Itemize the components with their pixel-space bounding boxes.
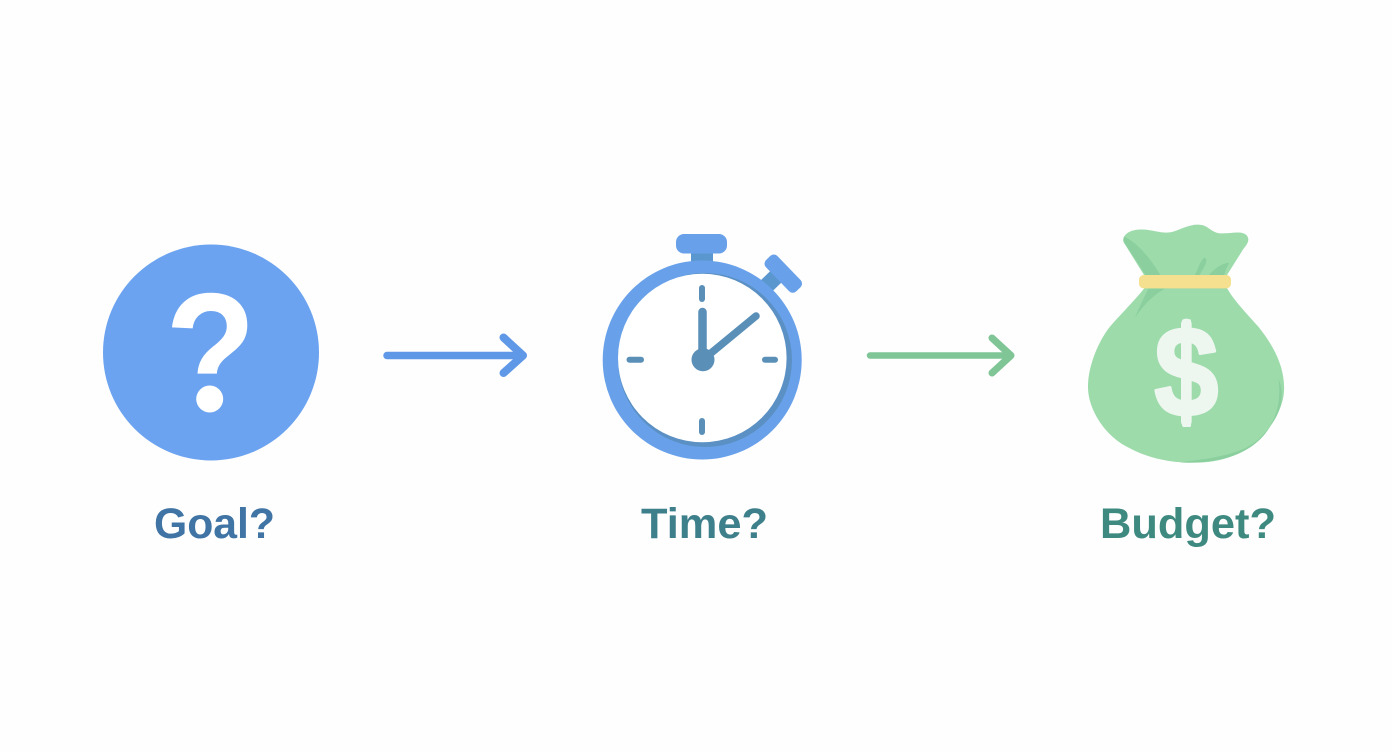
stopwatch side stem — [760, 271, 782, 292]
icon: blue circle with question mark: ? — [165, 260, 256, 444]
stopwatch ring — [603, 260, 802, 460]
infographic: goal, time, budget flow — [103, 224, 1284, 547]
label: Time?: Time? — [641, 500, 768, 548]
stopwatch side button — [762, 252, 804, 295]
icon: money bag — [1088, 225, 1284, 463]
bag neck — [1123, 225, 1248, 277]
stopwatch hands — [702, 312, 756, 360]
dollar sign: $ — [1154, 299, 1218, 443]
stopwatch centre pin — [692, 348, 714, 371]
arrow: blue, goal to time — [387, 338, 523, 373]
stopwatch hour ticks — [630, 288, 775, 432]
stopwatch face — [618, 274, 787, 442]
stopwatch inner shadow — [618, 273, 792, 447]
arrow: green, time to budget — [870, 338, 1011, 373]
bag body shading — [1135, 289, 1282, 463]
bag neck folds — [1124, 237, 1229, 276]
label: Goal?: Goal? — [154, 500, 275, 548]
label: Budget?: Budget? — [1100, 500, 1276, 548]
bag body — [1088, 287, 1284, 463]
icon: stopwatch — [603, 234, 804, 460]
stopwatch top stem — [691, 251, 713, 264]
stopwatch top button — [676, 234, 727, 254]
icon: blue circle with question mark — [103, 244, 319, 460]
bag tie band — [1139, 275, 1231, 288]
